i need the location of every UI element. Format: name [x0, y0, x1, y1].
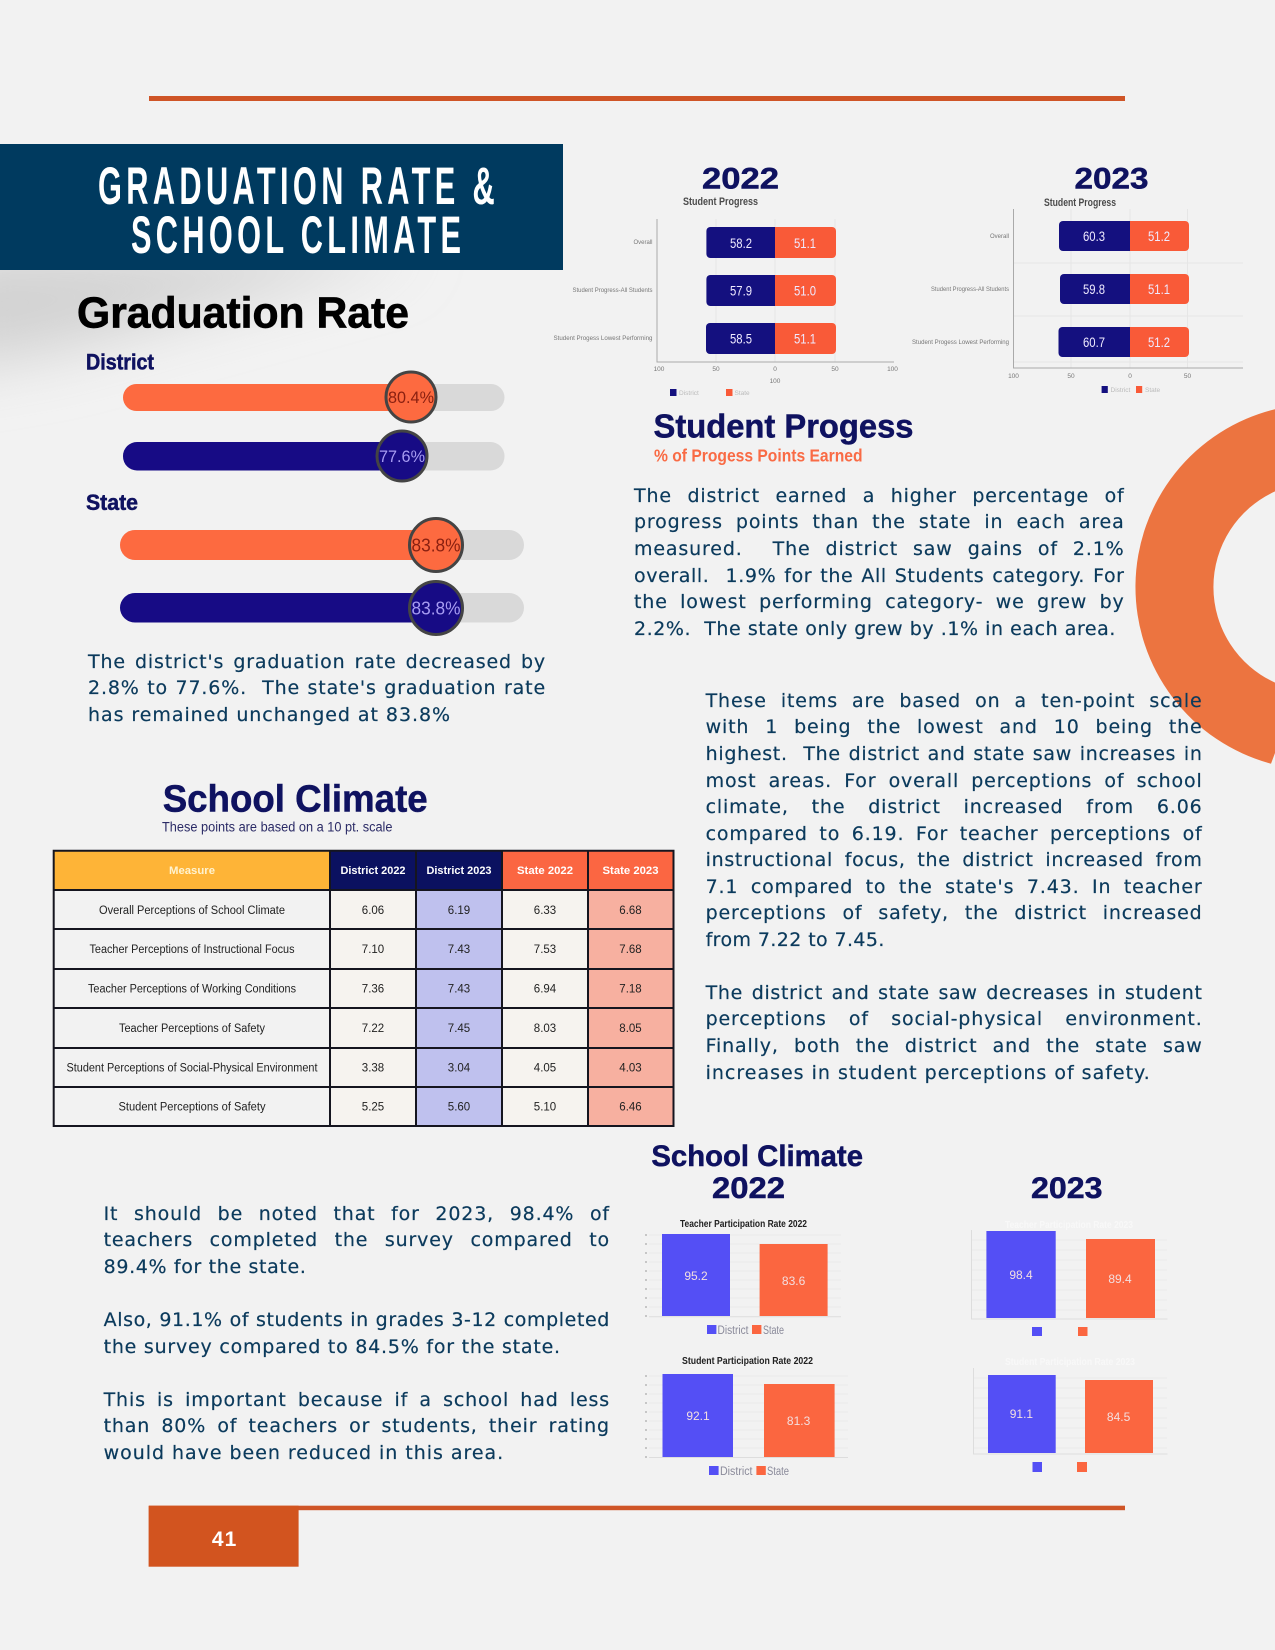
heading: school climate: School Climate — [163, 779, 428, 821]
footer rule — [149, 1506, 1125, 1510]
table: school climate: Teacher Perceptions of Instructional Focus — [90, 944, 295, 956]
text: survey participation note: It should be noted that for 2023, 98.4% of — [104, 1203, 610, 1225]
heading: student progess: Student Progess — [654, 408, 914, 445]
chart: student progress 2022: 0 — [773, 366, 777, 373]
table: school climate: 5.25 — [362, 1102, 384, 1114]
chart: student progress 2022: 51.0 — [794, 282, 816, 298]
text: school climate explanation: The district and state saw decreases in student — [706, 982, 1203, 1004]
chart: student progress 2023: 59.8 — [1083, 281, 1105, 297]
text: school climate explanation: perceptions of safety, the district increased — [706, 902, 1203, 924]
table: school climate: 3.38 — [362, 1062, 384, 1074]
table: school climate: 6.46 — [619, 1102, 642, 1114]
table: school climate: State 2022 — [517, 865, 573, 877]
chart: student participation 2022: District — [720, 1466, 753, 1478]
table: school climate: 6.06 — [362, 905, 384, 917]
text: survey participation note: the survey compared to 84.5% for the state. — [104, 1336, 561, 1358]
title banner: SCHOOL CLIMATE — [131, 207, 461, 265]
chart: teacher participation 2022: 95.2 — [684, 1269, 708, 1283]
table: school climate: Teacher Perceptions of Safety — [119, 1023, 265, 1035]
chart: student progress 2022: Student Progess Lowest Performing — [554, 336, 652, 342]
text: student progress summary — [634, 485, 1125, 640]
table: school climate: 7.43 — [448, 984, 470, 996]
text: survey participation note: teachers completed the survey compared to — [104, 1229, 610, 1251]
page number box — [149, 1506, 299, 1567]
text: student progress summary: progress points than the state in each area — [634, 511, 1125, 533]
progress bar: state navy 83.8% — [120, 582, 524, 634]
chart: student progress 2022: 51.1 — [794, 235, 816, 251]
text: survey participation note: would have been reduced in this area. — [104, 1442, 504, 1464]
table: school climate: Overall Perceptions of School Climate — [99, 905, 285, 917]
subheading: 10 pt scale: These points are based on a 10 pt. scale — [162, 820, 392, 835]
chart: student progress 2022: 50 — [831, 366, 839, 373]
chart: student progress 2022: District — [679, 390, 699, 397]
chart: student progress 2023: Student Progress-All Students — [931, 287, 1009, 293]
text: graduation rate summary: The district's graduation rate decreased by — [88, 651, 546, 673]
title banner — [0, 144, 563, 270]
title banner: GRADUATION RATE & — [98, 158, 495, 216]
progress bar: state navy 83.8%: 83.8% — [412, 598, 460, 618]
text: survey participation note: Also, 91.1% of students in grades 3-12 completed — [104, 1309, 610, 1331]
chart: student progress 2022: 58.5 — [730, 330, 752, 346]
text: school climate explanation: most areas. For overall perceptions of school — [706, 770, 1203, 792]
text: school climate explanation: These items are based on a ten-point scale — [706, 690, 1203, 712]
table: school climate: Student Perceptions of Social-Physical Environment — [66, 1062, 318, 1074]
heading: school climate 2022: School Climate — [651, 1140, 863, 1173]
chart: student participation 2023: 84.5 — [1107, 1410, 1131, 1424]
heading: school climate 2022 — [651, 1140, 863, 1205]
chart: student progress 2022 — [554, 196, 898, 397]
text: student progress summary: overall. 1.9% for the All Students category. For — [634, 565, 1125, 587]
chart: student participation 2023 — [973, 1356, 1168, 1472]
chart: student progress 2022: 57.9 — [730, 282, 752, 298]
chart: student participation 2022: 92.1 — [686, 1409, 710, 1423]
table: school climate: District 2022 — [340, 865, 406, 877]
text: school climate explanation: Finally, both the district and the state saw — [706, 1035, 1203, 1057]
text: survey participation note: This is important because if a school had less — [104, 1389, 610, 1411]
subheading: percent of progess points earned: % of Progess Points Earned — [654, 446, 862, 466]
table: school climate: 8.03 — [534, 1023, 556, 1035]
chart: teacher participation 2022: District — [718, 1325, 749, 1337]
table: school climate: 7.45 — [448, 1023, 470, 1035]
chart: student progress 2022: State — [734, 390, 750, 397]
chart: student participation 2022: State — [767, 1466, 789, 1478]
chart: student progress 2023: 51.2 — [1148, 228, 1170, 244]
chart: teacher participation 2022 — [645, 1218, 841, 1337]
text: student progress summary: The district earned a higher percentage of — [634, 485, 1125, 507]
text: student progress summary: 2.2%. The state only grew by .1% in each area. — [634, 618, 1116, 640]
page number box: 41 — [212, 1528, 237, 1551]
chart: student progress 2022: 100 — [770, 378, 781, 385]
text: survey participation note: than 80% of teachers or students, their rating — [104, 1415, 610, 1437]
chart: student progress 2023: 60.7 — [1083, 334, 1105, 350]
progress bar: district 77.6%: 77.6% — [379, 447, 425, 466]
table: school climate: Student Perceptions of Safety — [118, 1102, 266, 1114]
heading: 2022: 2022 — [702, 162, 779, 196]
chart: student progress 2023: 60.3 — [1083, 228, 1105, 244]
table: school climate: 6.19 — [448, 905, 470, 917]
table: school climate: 6.94 — [534, 984, 557, 996]
banner shadow — [0, 250, 420, 370]
progress bar: district 80.4% — [123, 372, 504, 422]
table: school climate: 3.04 — [448, 1062, 471, 1074]
chart: teacher participation 2023 — [971, 1219, 1168, 1336]
text: graduation rate summary: has remained unchanged at 83.8% — [88, 704, 451, 726]
table: school climate: State 2023 — [602, 865, 658, 877]
table: school climate: 7.18 — [619, 984, 642, 996]
table: school climate: 5.10 — [534, 1102, 556, 1114]
text: graduation rate summary: 2.8% to 77.6%. The state's graduation rate — [88, 677, 546, 699]
text: school climate explanation — [705, 690, 1203, 1084]
chart: student progress 2022: 100 — [654, 366, 665, 373]
text: student progress summary: the lowest performing category- we grew by — [634, 591, 1125, 613]
text: school climate explanation: climate, the district increased from 6.06 — [706, 796, 1203, 818]
chart: student progress 2023: Student Progess Lowest Performing — [912, 340, 1009, 346]
text: school climate explanation: highest. The district and state saw increases in — [706, 743, 1203, 765]
chart: student progress 2023: Student Progress — [1044, 197, 1116, 209]
table: school climate — [54, 851, 673, 1126]
chart: teacher participation 2022: Teacher Participation Rate 2022 — [680, 1218, 807, 1230]
chart: student progress 2022: Student Progress-All Students — [572, 288, 652, 294]
table: school climate: 7.22 — [362, 1023, 384, 1035]
table: school climate: Measure — [169, 865, 215, 877]
chart: teacher participation 2023: 89.4 — [1108, 1272, 1132, 1286]
heading: graduation rate: Graduation Rate — [77, 288, 409, 338]
chart: student progress 2023: 51.2 — [1148, 334, 1170, 350]
table: school climate: 7.43 — [448, 944, 470, 956]
chart: student progress 2023: State — [1145, 387, 1161, 394]
table: school climate: 4.03 — [619, 1062, 642, 1074]
heading: school climate 2022: 2022 — [712, 1172, 785, 1205]
table: school climate: 7.68 — [619, 944, 642, 956]
label: district: District — [86, 350, 155, 374]
chart: student progress 2022: 100 — [887, 366, 898, 373]
heading: 2023: 2023 — [1074, 162, 1148, 196]
chart: student progress 2023: District — [1110, 387, 1131, 394]
chart: student progress 2022: 58.2 — [730, 235, 752, 251]
text: school climate explanation: compared to 6.19. For teacher perceptions of — [706, 823, 1203, 845]
table: school climate: 6.68 — [619, 905, 642, 917]
progress bar: state 83.8%: 83.8% — [412, 536, 460, 556]
heading: 2023 participation: 2023 — [1031, 1172, 1102, 1205]
table: school climate: 7.10 — [362, 944, 384, 956]
chart: teacher participation 2022: State — [763, 1325, 784, 1337]
progress bar: state 83.8% — [120, 518, 524, 572]
chart: student progress 2022: 51.1 — [794, 330, 816, 346]
chart: student progress 2023 — [912, 197, 1243, 394]
chart: student progress 2023: 50 — [1184, 373, 1191, 380]
chart: student progress 2022: Overall — [633, 240, 652, 246]
chart: teacher participation 2023: 98.4 — [1009, 1268, 1033, 1282]
table: school climate: 4.05 — [534, 1062, 556, 1074]
text: school climate explanation: perceptions of social-physical environment. — [706, 1008, 1203, 1030]
chart: teacher participation 2022: 83.6 — [782, 1274, 806, 1288]
text: survey participation note — [103, 1203, 610, 1464]
table: school climate: 7.36 — [362, 984, 384, 996]
chart: student progress 2022: Student Progress — [683, 196, 758, 208]
top rule — [149, 96, 1125, 101]
table: school climate: District 2023 — [426, 865, 492, 877]
text: school climate explanation: increases in student perceptions of safety. — [706, 1062, 1151, 1084]
text: school climate explanation: instructional focus, the district increased from — [706, 849, 1203, 871]
chart: student progress 2023: 100 — [1008, 373, 1019, 380]
chart: student progress 2022: 50 — [712, 366, 720, 373]
chart: student participation 2022: Student Participation Rate 2022 — [682, 1355, 813, 1367]
text: school climate explanation: from 7.22 to 7.45. — [706, 929, 885, 951]
chart: teacher participation 2023: Teacher Participation Rate 2023 — [1005, 1219, 1133, 1231]
table: school climate: 8.05 — [619, 1023, 642, 1035]
progress bar: district 77.6% — [123, 431, 504, 481]
text: school climate explanation: 7.1 compared to the state's 7.43. In teacher — [706, 876, 1203, 898]
text: student progress summary: measured. The district saw gains of 2.1% — [634, 538, 1125, 560]
table: school climate: 7.53 — [534, 944, 556, 956]
text: school climate explanation: with 1 being the lowest and 10 being the — [706, 716, 1203, 738]
chart: student participation 2023: 91.1 — [1010, 1407, 1033, 1421]
chart: student participation 2022: 81.3 — [787, 1414, 811, 1428]
table: school climate: 6.33 — [534, 905, 556, 917]
text: survey participation note: 89.4% for the state. — [104, 1256, 307, 1278]
chart: student participation 2022 — [645, 1355, 848, 1478]
chart: student progress 2023: Overall — [990, 234, 1009, 240]
label: state: State — [86, 490, 138, 515]
chart: student participation 2023: Student Participation Rate 2023 — [1005, 1356, 1135, 1368]
chart: student progress 2023: 50 — [1067, 373, 1075, 380]
chart: student progress 2023: 51.1 — [1148, 281, 1170, 297]
table: school climate: 5.60 — [448, 1102, 470, 1114]
progress bar: district 80.4%: 80.4% — [388, 388, 434, 407]
text: graduation rate summary — [88, 651, 546, 726]
table: school climate: Teacher Perceptions of Working Conditions — [88, 984, 296, 996]
decorative orange ring — [1135, 409, 1275, 764]
chart: student progress 2023: 0 — [1128, 373, 1132, 380]
